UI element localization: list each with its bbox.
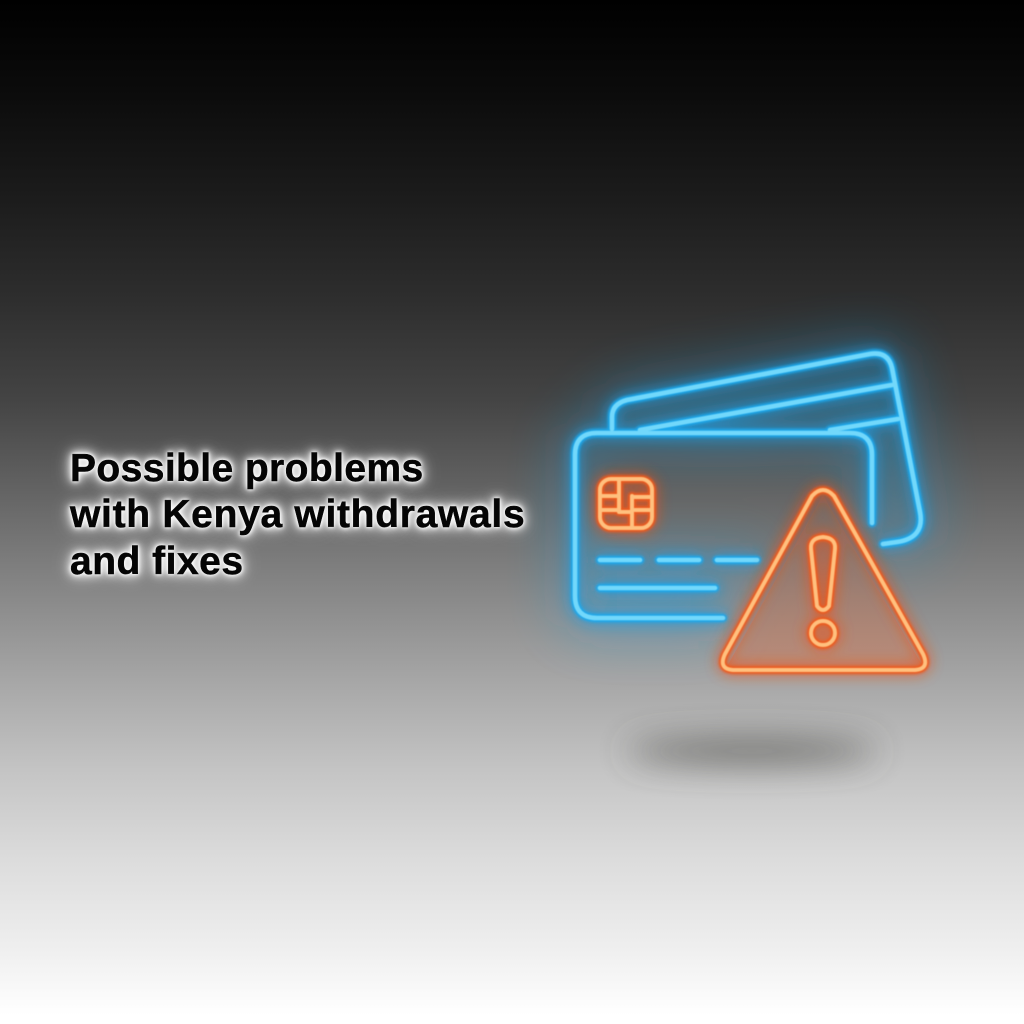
panel: back and front credit cards (575, 354, 921, 618)
orange ambient glow (725, 495, 925, 670)
title (60, 442, 534, 585)
title: Possible problems (70, 446, 424, 490)
title: with Kenya withdrawals (70, 493, 525, 536)
ground shadow (627, 740, 877, 762)
blue ambient glow (575, 354, 921, 618)
icon: warning triangle and card chip (600, 479, 925, 670)
title: and fixes (70, 540, 244, 582)
